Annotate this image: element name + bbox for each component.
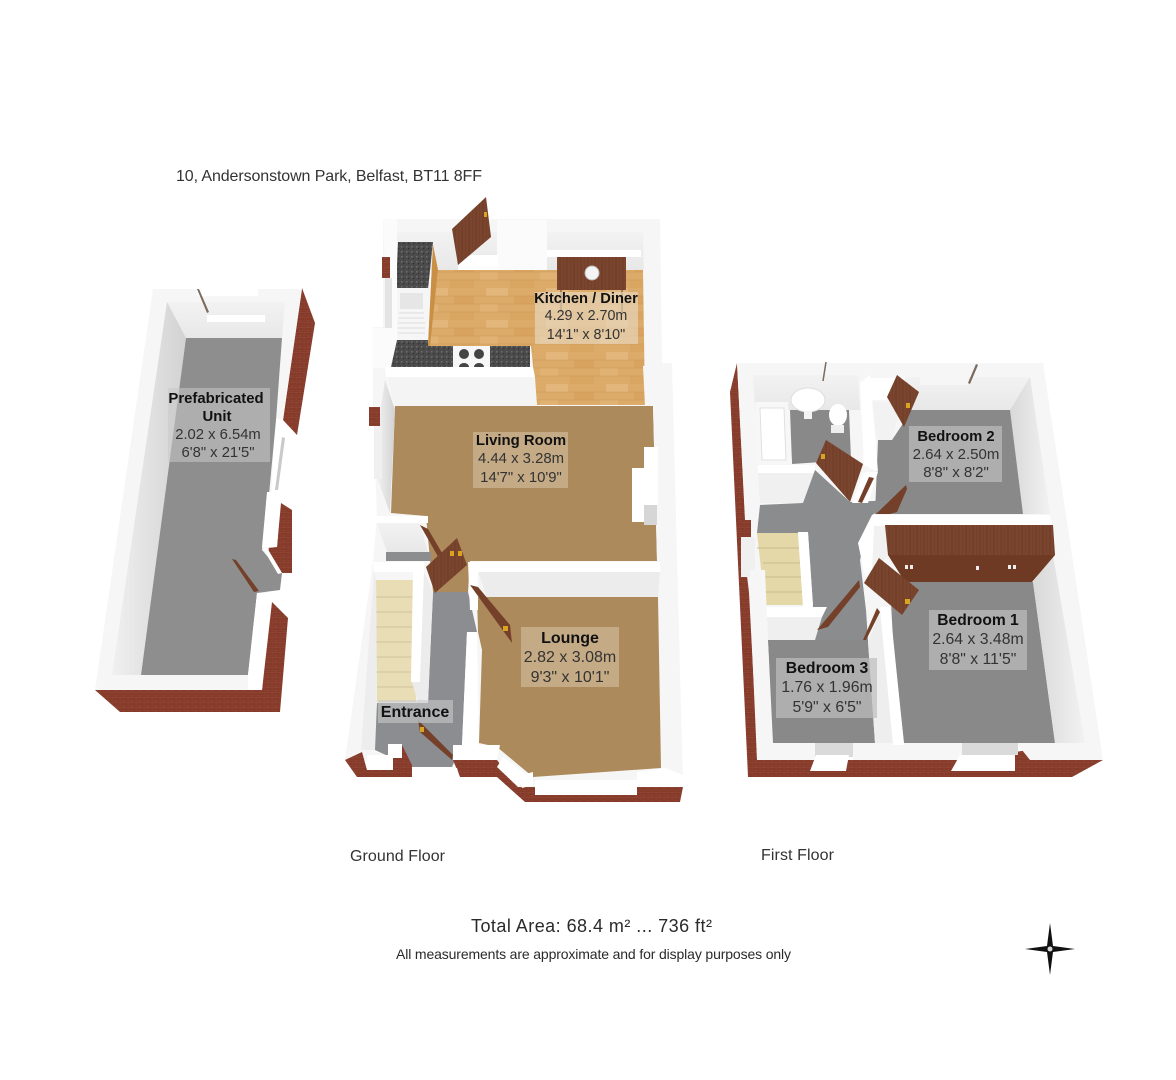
label: kitchen diner: Kitchen / Diner — [534, 291, 638, 307]
first floor brick — [730, 363, 1103, 777]
dining table — [557, 257, 626, 312]
label: prefabricated unit: Prefabricated — [168, 391, 264, 407]
label: lounge — [521, 627, 619, 687]
wall tops of unit — [95, 289, 302, 690]
disclaimer: All measurements are approximate and for display purposes only — [396, 946, 791, 962]
label: living room — [473, 432, 568, 488]
wall between bedrooms 1 and 2 — [858, 515, 1052, 577]
stairs — [376, 580, 416, 702]
bedroom 1 floor — [890, 582, 1055, 743]
label: prefabricated unit — [168, 388, 270, 462]
label: bedroom 3: 1.76 x 1.96m — [781, 679, 873, 696]
lounge floor — [477, 597, 661, 777]
entrance hall floor — [375, 592, 477, 767]
stairs — [757, 533, 803, 605]
wardrobe side door — [863, 608, 880, 640]
bedroom 2 right wall — [1010, 377, 1050, 514]
sink — [393, 288, 428, 340]
wall between living room and lounge — [468, 560, 683, 775]
label: bedroom 2 — [909, 426, 1002, 482]
wardrobes — [885, 525, 1055, 582]
under stairs cupboard — [373, 516, 431, 572]
floor of unit — [141, 338, 282, 675]
wall between hall and lounge — [462, 632, 479, 745]
hob — [453, 346, 490, 367]
bathroom floor — [790, 410, 851, 464]
bedroom 2 window — [920, 364, 978, 385]
wall between kitchen and living room — [385, 363, 672, 560]
bathroom rear wall — [753, 375, 860, 410]
bedroom 3 left wall — [750, 570, 773, 757]
fireplace alcove — [632, 447, 658, 525]
bedroom 2 floor — [875, 410, 1023, 514]
kitchen rear door — [452, 197, 491, 265]
kitchen worktop rear — [396, 242, 433, 289]
rear wall face — [167, 302, 285, 338]
label: bedroom 2: 2.64 x 2.50m — [913, 446, 999, 463]
bedroom 3 door — [817, 580, 860, 630]
total area: Total Area: 68.4 m² ... 736 ft² — [471, 916, 712, 936]
wall right of stairs — [798, 532, 813, 607]
kitchen floor — [428, 245, 645, 405]
label: bedroom 1: 2.64 x 3.48m — [932, 631, 1024, 648]
lounge door — [470, 585, 512, 643]
label: bedroom 3: 5'9" x 6'5" — [792, 699, 862, 716]
first floor wall tops — [737, 363, 1103, 760]
label: entrance: Entrance — [381, 704, 449, 721]
label: kitchen diner: 4.29 x 2.70m — [545, 308, 627, 324]
basin — [791, 362, 826, 419]
rear window — [197, 289, 265, 322]
front window recesses — [815, 743, 1018, 757]
brick exterior of unit — [95, 288, 315, 712]
front wall brick — [345, 745, 683, 802]
label: bedroom 1: Bedroom 1 — [937, 612, 1019, 629]
wall below bath — [758, 465, 815, 503]
label: bedroom 2: 8'8" x 8'2" — [923, 464, 989, 481]
label: bedroom 2: Bedroom 2 — [917, 429, 995, 445]
label: lounge: Lounge — [541, 630, 599, 647]
cupboard edge — [428, 245, 438, 346]
kitchen left wall and window — [373, 219, 397, 368]
panel: first floor — [730, 362, 1103, 777]
bedroom 3 floor — [768, 640, 875, 743]
bedroom 1 door — [864, 558, 919, 615]
left wall face — [112, 302, 186, 675]
wall stubs — [262, 492, 281, 547]
bedroom 2 door — [887, 375, 919, 427]
bedroom 1 right wall — [1033, 555, 1085, 743]
bedroom 2 rear wall — [905, 377, 1030, 410]
panel: prefabricated unit — [95, 288, 315, 712]
address heading: 10, Andersonstown Park, Belfast, BT11 8FF — [176, 168, 482, 185]
label: bedroom 1: 8'8" x 11'5" — [940, 651, 1016, 668]
label: kitchen diner — [534, 291, 638, 344]
kitchen right wall — [643, 219, 662, 366]
wall above bedroom 3 — [765, 607, 827, 646]
first floor caption: First Floor — [761, 847, 835, 864]
bath — [755, 402, 792, 464]
label: prefabricated unit: Unit — [203, 409, 232, 425]
front window sills — [810, 755, 1015, 771]
label: living room: 14'7" x 10'9" — [480, 470, 562, 486]
left wall window — [741, 520, 755, 577]
wall right of bathroom — [860, 375, 878, 472]
bedroom 3 right wall face — [868, 612, 893, 743]
label: kitchen diner: 14'1" x 8'10" — [547, 327, 625, 343]
kitchen door handle — [484, 212, 487, 217]
cupboard in bedroom 2 — [870, 378, 905, 440]
hall door — [420, 525, 467, 593]
side window — [275, 437, 297, 497]
label: lounge: 9'3" x 10'1" — [531, 669, 609, 686]
living room floor — [391, 406, 657, 592]
panel: ground floor — [345, 197, 683, 802]
label: entrance — [378, 700, 453, 723]
label: living room: 4.44 x 3.28m — [478, 451, 564, 467]
label: living room: Living Room — [476, 433, 566, 449]
kitchen worktop front — [391, 340, 453, 367]
entrance left wall face — [361, 572, 377, 750]
label: prefabricated unit: 6'8" x 21'5" — [182, 445, 254, 461]
kitchen rear window sill — [458, 220, 641, 270]
living room left wall and window — [369, 380, 395, 513]
bedroom 2 landing door — [876, 485, 907, 514]
ground floor caption: Ground Floor — [350, 848, 446, 865]
kitchen rear wall face — [397, 232, 645, 270]
icon: compass star — [1025, 923, 1075, 975]
label: lounge: 2.82 x 3.08m — [524, 649, 616, 666]
label: bedroom 3: Bedroom 3 — [786, 660, 868, 677]
wall right of stairs — [411, 572, 433, 703]
side door — [232, 559, 259, 592]
label: bedroom 1 — [929, 610, 1027, 670]
toilet — [829, 404, 847, 433]
landing floor — [757, 470, 897, 640]
bathroom door — [816, 440, 878, 503]
front wall tops and windows — [367, 744, 683, 795]
label: prefabricated unit: 2.02 x 6.54m — [175, 427, 261, 443]
entrance door — [418, 720, 453, 760]
label: bedroom 3 — [776, 658, 877, 718]
ground floor wall tops — [345, 219, 683, 787]
wall between bedrooms 1 and 3 — [880, 607, 904, 745]
